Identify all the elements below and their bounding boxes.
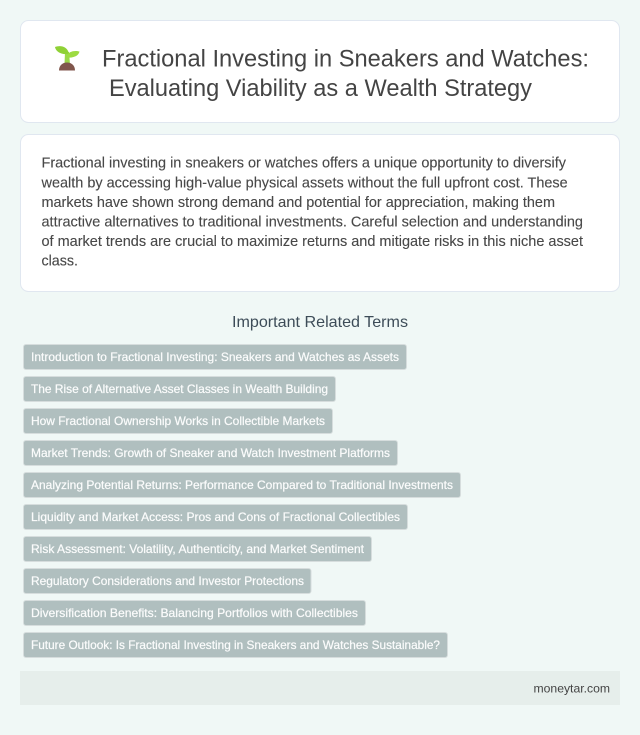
term 2 — [24, 376, 336, 402]
term 7: Risk Assessment: Volatility, Authenticity, and Market Sentiment — [31, 542, 365, 556]
title — [102, 46, 589, 102]
term 2: The Rise of Alternative Asset Classes in Wealth Building — [31, 382, 328, 396]
term 8 — [24, 568, 311, 594]
term 6 — [24, 504, 408, 530]
icon: sprout — [55, 46, 80, 70]
heading: related terms: Important Related Terms — [232, 314, 408, 331]
term 4 — [24, 440, 398, 466]
term 7 — [24, 536, 372, 562]
title: Fractional Investing in Sneakers and Watches: — [102, 46, 589, 73]
term 3: How Fractional Ownership Works in Collectible Markets — [31, 414, 325, 428]
footer — [20, 671, 620, 705]
term 3 — [24, 408, 332, 434]
term 6: Liquidity and Market Access: Pros and Cons of Fractional Collectibles — [31, 510, 400, 524]
title: Evaluating Viability as a Wealth Strategy — [109, 75, 532, 102]
term 9 — [24, 600, 366, 626]
term 8: Regulatory Considerations and Investor Protections — [31, 574, 304, 588]
summary text: of market trends are crucial to maximize returns and mitigate risks in this niche asset — [42, 234, 583, 250]
summary text: class. — [42, 254, 78, 270]
term 4: Market Trends: Growth of Sneaker and Watch Investment Platforms — [31, 446, 390, 460]
summary text: attractive alternatives to traditional investments. Careful selection and understanding — [42, 214, 583, 230]
term 1 — [24, 344, 406, 370]
summary text: wealth by accessing high-value physical assets without the full upfront cost. These — [40, 175, 568, 191]
term 10: Future Outlook: Is Fractional Investing in Sneakers and Watches Sustainable? — [31, 638, 440, 652]
footer: moneytar.com — [534, 682, 610, 696]
term 5: Analyzing Potential Returns: Performance Compared to Traditional Investments — [31, 478, 453, 492]
summary text: markets have shown strong demand and potential for appreciation, making them — [42, 195, 555, 211]
term 1: Introduction to Fractional Investing: Sneakers and Watches as Assets — [31, 350, 399, 364]
term 5 — [24, 472, 460, 498]
summary text: Fractional investing in sneakers or watches offers a unique opportunity to diversify — [42, 156, 567, 172]
term list — [24, 344, 460, 658]
summary text — [40, 156, 583, 270]
panel: summary card — [20, 134, 620, 292]
term 10 — [24, 632, 448, 658]
term 9: Diversification Benefits: Balancing Portfolios with Collectibles — [31, 606, 358, 620]
panel: title card — [20, 20, 620, 122]
